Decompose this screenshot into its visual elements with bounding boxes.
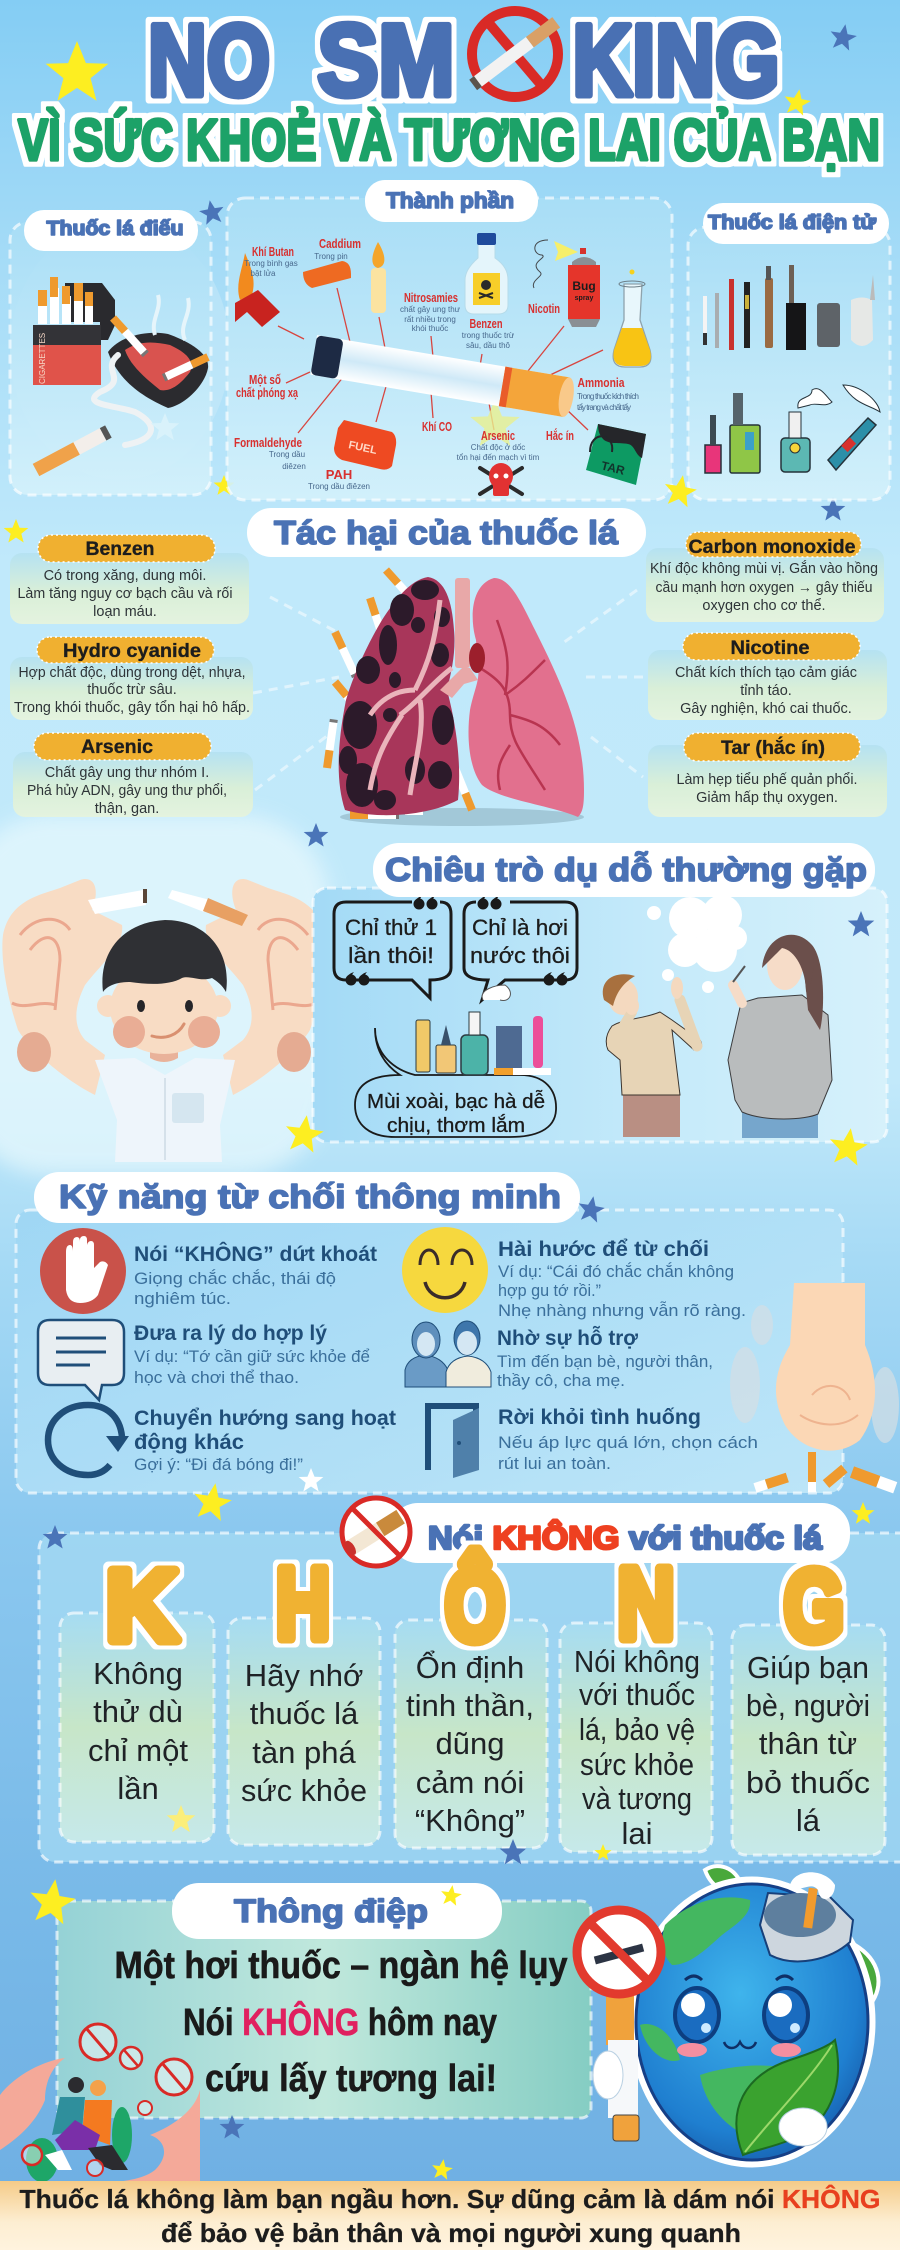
ingredient labels: Khí Butan xyxy=(252,244,294,259)
skill: give a reason: học và chơi thể thao. xyxy=(134,1368,299,1387)
ingredient labels: bật lửa xyxy=(251,269,276,278)
ingredient labels: Khí CO xyxy=(422,419,452,434)
message text: cứu lấy tương lai! xyxy=(205,2058,497,2100)
cigarettes around the damaged lung xyxy=(323,567,476,819)
card text K: chỉ một xyxy=(88,1733,188,1768)
skill: firm no: nghiêm túc. xyxy=(134,1289,231,1308)
icon: ashtray with cigarettes xyxy=(94,295,210,445)
card text H xyxy=(241,1658,367,1808)
ingredient labels: Nicotin xyxy=(528,301,560,316)
card: Benzen: Benzen xyxy=(86,539,154,560)
heading: Nói KHÔNG với thuốc lá xyxy=(390,1503,850,1563)
card text G: bè, người xyxy=(746,1688,870,1723)
card: Hydro cyanide: Hydro cyanide xyxy=(63,641,201,662)
icon: door xyxy=(425,1403,479,1478)
card text Ô xyxy=(406,1649,534,1838)
icon: flask of ammonia xyxy=(613,270,651,367)
card: Arsenic xyxy=(13,733,253,817)
ingredient labels: Một số xyxy=(249,372,281,387)
main title: NO SMOKING: NO xyxy=(148,5,270,117)
ingredient labels: chất phóng xạ xyxy=(236,385,299,400)
card text G: lá xyxy=(796,1803,821,1838)
footer banner xyxy=(0,2181,900,2250)
skill: leave: Nếu áp lực quá lớn, chọn cách xyxy=(498,1433,758,1452)
panel: e-cigarettes xyxy=(688,203,890,500)
card text G: thân từ xyxy=(759,1726,857,1761)
heading: Nói KHÔNG với thuốc lá: Nói KHÔNG với thuốc lá xyxy=(428,1520,822,1556)
card: Benzen: Có trong xăng, dung môi. xyxy=(44,568,206,584)
skill: leave xyxy=(498,1406,758,1473)
leaves on top xyxy=(705,1866,742,1892)
ingredient labels: Trong bình gas xyxy=(244,259,298,268)
icon: no smoking sign xyxy=(342,1498,410,1566)
letter G: G xyxy=(784,1550,844,1662)
skill: give a reason: Ví dụ: “Tớ cần giữ sức khỏe để xyxy=(134,1347,370,1366)
card: Hydro cyanide xyxy=(10,637,253,720)
ingredient labels: Arsenic xyxy=(481,428,515,443)
message text: Một hơi thuốc – ngàn hệ lụy xyxy=(114,1945,568,1987)
card text G: bỏ thuốc xyxy=(746,1765,870,1800)
card: Tar xyxy=(648,733,887,817)
card text N: với thuốc xyxy=(579,1677,695,1712)
card text G: Giúp bạn xyxy=(747,1650,869,1685)
heading: Thành phần: Thành phần xyxy=(386,188,514,213)
icon: no smoking sign in title xyxy=(469,11,560,97)
globe xyxy=(632,1880,872,2164)
healthy lung xyxy=(468,578,584,817)
icon: circular arrow xyxy=(48,1405,129,1475)
card: Nicotine xyxy=(648,633,887,720)
icon: two people xyxy=(405,1321,491,1387)
leaf xyxy=(736,2040,838,2155)
icon: stop hand xyxy=(40,1228,126,1314)
icon: candle xyxy=(371,242,386,313)
panel: message xyxy=(57,1883,591,2118)
ingredient labels: Hắc ín xyxy=(546,428,574,443)
icon: lighter xyxy=(235,253,280,327)
speech bubble: flavours: chịu, thơm lắm xyxy=(387,1114,525,1137)
skill: firm no: Giọng chắc chắc, thái độ xyxy=(134,1269,336,1288)
ingredient labels: Trong pin xyxy=(314,252,348,261)
message text xyxy=(114,1945,568,2100)
heading: Tác hại của thuốc lá: Tác hại của thuốc lá xyxy=(274,514,619,551)
skill: ask for help: Nhờ sự hỗ trợ xyxy=(497,1326,638,1350)
ingredient labels: rất nhiều trong xyxy=(404,315,456,324)
ingredient labels: Trong dầu điêzen xyxy=(308,482,370,491)
card text K xyxy=(88,1656,188,1806)
letter Ô: Ô xyxy=(445,1550,505,1662)
broken cigarette xyxy=(88,889,248,926)
card: Nicotine: Gây nghiện, khó cai thuốc. xyxy=(680,701,852,717)
main title: NO SMOKING: SM xyxy=(318,5,454,117)
card: Carbon monoxide: Carbon monoxide xyxy=(688,537,856,558)
skill: give a reason xyxy=(134,1322,370,1387)
skill: leave: rút lui an toàn. xyxy=(498,1454,611,1473)
ingredient labels xyxy=(234,236,639,491)
skill: firm no xyxy=(134,1242,377,1308)
ingredient labels: PAH xyxy=(326,467,352,482)
speech bubble: try once: Chỉ thử 1 xyxy=(345,915,437,940)
card: Hydro cyanide: thuốc trừ sâu. xyxy=(87,682,177,698)
illustration: man coughing xyxy=(603,974,702,1137)
skill: redirect: động khác xyxy=(134,1431,244,1454)
card: Nicotine: Chất kích thích tạo cảm giác xyxy=(675,665,857,681)
footer banner: để bảo vệ bản thân và mọi người xung quanh xyxy=(161,2218,741,2248)
card text H: tàn phá xyxy=(252,1735,356,1770)
icon: tar bucket: TAR xyxy=(600,458,627,478)
skill: give a reason: Đưa ra lý do hợp lý xyxy=(134,1322,327,1345)
card: Arsenic: Phá hủy ADN, gây ung thư phổi, xyxy=(27,783,227,799)
illustration: woman smoking xyxy=(728,935,832,1138)
icon: fuel can xyxy=(334,420,396,470)
card: Tar: Tar (hắc ín) xyxy=(721,737,825,759)
letter K: K xyxy=(106,1550,178,1662)
trachea xyxy=(455,578,470,668)
ingredient labels: Chất độc ở dốc xyxy=(471,443,525,452)
skill: humor: hợp gu tớ rồi.” xyxy=(498,1281,601,1300)
illustration: earth mascot xyxy=(577,1866,878,2164)
panel: ingredients xyxy=(227,180,672,500)
heading: Thuốc lá điếu: Thuốc lá điếu xyxy=(46,218,184,240)
skill: ask for help: Tìm đến bạn bè, người thân, xyxy=(497,1352,713,1371)
card text K: Không xyxy=(93,1656,183,1691)
card text N xyxy=(574,1644,700,1851)
card: Arsenic: Chất gây ung thư nhóm I. xyxy=(45,765,209,781)
card text N: lá, bảo vệ xyxy=(579,1712,695,1747)
card: Nicotine: tỉnh táo. xyxy=(740,683,792,699)
heading: Thông điệp xyxy=(172,1883,502,1939)
skill: humor: Hài hước để từ chối xyxy=(498,1238,709,1261)
ingredient labels: khói thuốc xyxy=(412,324,448,333)
card text G xyxy=(746,1650,870,1838)
ingredient labels: Trong thuốc kích thích xyxy=(577,392,639,401)
heading: Chiêu trò dụ dỗ thường gặp xyxy=(373,843,875,897)
ingredient labels: Caddium xyxy=(319,236,361,251)
card text H: thuốc lá xyxy=(250,1696,359,1731)
card: Carbon monoxide: oxygen cho cơ thể. xyxy=(702,598,826,614)
card text N: sức khỏe xyxy=(580,1747,694,1782)
ingredient labels: Ammonia xyxy=(578,375,625,390)
ingredient labels: Benzen xyxy=(470,316,503,331)
cards xyxy=(60,1613,214,1842)
ingredient labels: chất gây ung thư xyxy=(400,305,461,314)
star xyxy=(662,472,699,508)
speech bubble: try once xyxy=(334,896,451,998)
ashtray on head xyxy=(760,1872,853,1961)
icon: skull and crossbones xyxy=(480,463,522,496)
ingredient labels: tổn hại đến mạch vì tim xyxy=(457,453,540,462)
ingredient labels: sâu, dầu thô xyxy=(466,341,511,350)
arms and hands xyxy=(2,879,122,1095)
icons: vape illustrations row xyxy=(705,385,880,473)
skill: humor xyxy=(498,1238,746,1320)
heading: Tác hại của thuốc lá xyxy=(247,508,646,557)
card: Hydro cyanide: Trong khói thuốc, gây tổn hại hô hấp. xyxy=(14,700,250,716)
speech bubble: flavours xyxy=(355,1028,556,1137)
card text H: Hãy nhớ xyxy=(245,1658,363,1693)
stars xyxy=(283,911,874,1167)
speech bubble: only vapor xyxy=(464,896,577,1000)
card text Ô: cảm nói xyxy=(416,1765,524,1800)
ingredient labels: trong thuốc trừ xyxy=(462,331,515,340)
heading: Thông điệp: Thông điệp xyxy=(234,1893,428,1929)
skill: leave: Rời khỏi tình huống xyxy=(498,1406,701,1429)
icon: battery xyxy=(303,261,351,288)
face xyxy=(673,1976,810,2057)
icon: bug spray can: Bug xyxy=(572,279,596,293)
skill: redirect: Chuyển hướng sang hoạt xyxy=(134,1407,396,1430)
skill: redirect: Gợi ý: “Đi đá bóng đi!” xyxy=(134,1455,303,1474)
illustration: smoke cloud xyxy=(647,895,747,993)
illustration: boy breaking a cigarette xyxy=(2,879,326,1162)
card: Hydro cyanide: Hợp chất độc, dùng trong dệt, nhựa, xyxy=(18,665,246,681)
card text N: lai xyxy=(621,1816,653,1851)
ingredient labels: tẩy trang và chất tẩy xyxy=(577,403,631,412)
ingredient labels: Formaldehyde xyxy=(234,435,302,450)
card: Carbon monoxide: cầu mạnh hơn oxygen → gây thiếu xyxy=(656,580,872,596)
no smoking signs xyxy=(22,2024,192,2176)
card: Benzen: loạn máu. xyxy=(93,604,157,620)
skill: ask for help xyxy=(497,1326,713,1390)
card text Ô: “Không” xyxy=(415,1803,525,1838)
icon: burning cigarette xyxy=(33,413,179,476)
ingredient labels: Trong dầu xyxy=(269,450,305,459)
heading: Thuốc lá điện tử xyxy=(703,203,889,244)
skill: redirect xyxy=(134,1407,396,1474)
card: Arsenic: Arsenic xyxy=(81,737,153,758)
shirt xyxy=(95,1058,235,1162)
message text: Nói KHÔNG hôm nay xyxy=(183,1999,497,2044)
card text N: và tương xyxy=(582,1781,692,1816)
card text K: thử dù xyxy=(93,1694,183,1729)
speech bubble: try once: lần thôi! xyxy=(348,943,434,968)
card: Benzen: Làm tăng nguy cơ bạch cầu và rối xyxy=(18,586,232,602)
icon: fuel can: FUEL xyxy=(347,439,378,457)
panel: refusal skills xyxy=(16,1172,899,1493)
heading: Thành phần xyxy=(365,180,538,222)
card text H: sức khỏe xyxy=(241,1773,367,1808)
card text Ô: dũng xyxy=(436,1726,504,1761)
illustration: fist crushing cigarettes xyxy=(730,1283,899,1493)
head xyxy=(150,1045,178,1062)
card: Tar: Làm hẹp tiểu phế quản phổi. xyxy=(676,772,858,788)
skill: humor: Ví dụ: “Cái đó chắc chắn không xyxy=(498,1262,734,1281)
icon: cigarette pack: CIGARETTES xyxy=(38,333,47,384)
icons: vape devices row xyxy=(703,265,875,350)
card: Tar: Giảm hấp thụ oxygen. xyxy=(696,790,838,806)
ingredient labels: diêzen xyxy=(282,462,306,471)
heading: Thuốc lá điện tử: Thuốc lá điện tử xyxy=(708,212,877,234)
panel: say no to tobacco xyxy=(39,1480,900,1864)
letter N: N xyxy=(618,1548,674,1660)
heading: Chiêu trò dụ dỗ thường gặp: Chiêu trò dụ dỗ thường gặp xyxy=(385,851,867,888)
card text K: lần xyxy=(117,1771,159,1806)
tar blotches xyxy=(339,580,454,810)
illustration: hands protecting people from smoking xyxy=(0,2024,200,2182)
hands xyxy=(779,2108,827,2146)
letter H: H xyxy=(276,1548,330,1660)
card text Ô: tinh thần, xyxy=(406,1688,534,1723)
heading: Kỹ năng từ chối thông minh xyxy=(34,1172,580,1223)
card: Benzen xyxy=(10,535,249,624)
heading: Thuốc lá điếu xyxy=(24,210,198,251)
heading: Kỹ năng từ chối thông minh: Kỹ năng từ chối thông minh xyxy=(59,1178,561,1215)
card: Carbon monoxide xyxy=(646,532,884,622)
card text N: Nói không xyxy=(574,1644,700,1679)
stars xyxy=(167,1805,612,1864)
skill: ask for help: thầy cô, cha mẹ. xyxy=(497,1371,625,1390)
card: Arsenic: thận, gan. xyxy=(95,801,159,817)
central cigarette xyxy=(310,335,576,418)
no smoking paddle xyxy=(577,1910,661,2141)
icon: cigarette pack xyxy=(33,277,115,385)
speech bubble: only vapor: nước thôi xyxy=(470,943,570,968)
ingredient labels: Nitrosamies xyxy=(404,290,458,305)
main title: NO SMOKING xyxy=(148,5,780,117)
skill: humor: Nhẹ nhàng nhưng vẫn rõ ràng. xyxy=(498,1301,746,1320)
panel: common lures xyxy=(283,888,887,1167)
card: Carbon monoxide: Khí độc không mùi vị. Gắn vào hồng xyxy=(650,560,878,577)
connector lines xyxy=(278,288,603,433)
speech bubble: only vapor: Chỉ là hơi xyxy=(472,915,568,940)
panel: cigarettes xyxy=(10,210,211,495)
card text Ô: Ổn định xyxy=(416,1649,524,1685)
people xyxy=(26,2077,132,2182)
speech bubble: flavours: Mùi xoài, bạc hà dễ xyxy=(367,1090,545,1113)
card: Nicotine: Nicotine xyxy=(730,638,810,659)
decorative stars top xyxy=(4,22,859,847)
icon: speech bubble xyxy=(38,1320,124,1400)
footer banner: Thuốc lá không làm bạn ngầu hơn. Sự dũng cảm là dám nói KHÔNG xyxy=(20,2184,880,2214)
icon: bug spray can xyxy=(533,240,600,327)
illustration: damaged and healthy lungs xyxy=(323,567,584,826)
icon: tar bucket xyxy=(586,424,646,485)
icon: poison bottle xyxy=(465,233,508,314)
main title: NO SMOKING: KING xyxy=(572,5,780,117)
icon: smiley xyxy=(402,1227,488,1313)
star xyxy=(198,198,226,226)
illustration: vape products xyxy=(416,985,551,1075)
skill: firm no: Nói “KHÔNG” dứt khoát xyxy=(134,1242,377,1266)
icon: bug spray can: spray xyxy=(575,295,593,302)
stars xyxy=(27,1876,463,2180)
